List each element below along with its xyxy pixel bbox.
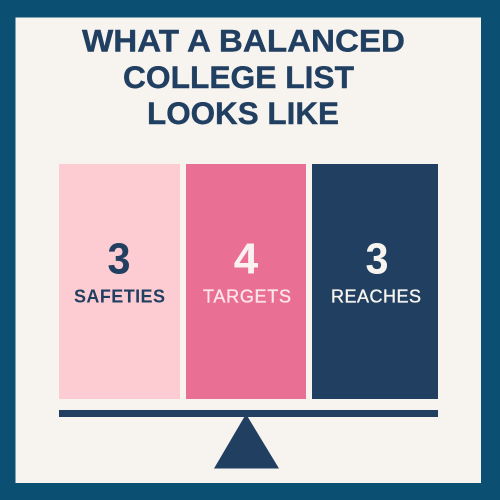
number: reaches: 3 [366, 234, 388, 284]
panel: reaches [312, 164, 438, 399]
number: safeties: 3 [108, 234, 130, 284]
scale beam [59, 410, 438, 417]
title: WHAT A BALANCED [82, 22, 405, 58]
number: targets: 4 [234, 234, 259, 284]
label: safeties: SAFETIES [74, 286, 165, 306]
title: COLLEGE LIST [123, 59, 354, 95]
panel: safeties [59, 164, 180, 399]
scale fulcrum [214, 414, 279, 468]
label: reaches: REACHES [331, 286, 421, 306]
label: targets: TARGETS [203, 286, 291, 306]
title [82, 22, 405, 131]
title: LOOKS LIKE [147, 95, 339, 131]
panel: targets [186, 164, 306, 399]
